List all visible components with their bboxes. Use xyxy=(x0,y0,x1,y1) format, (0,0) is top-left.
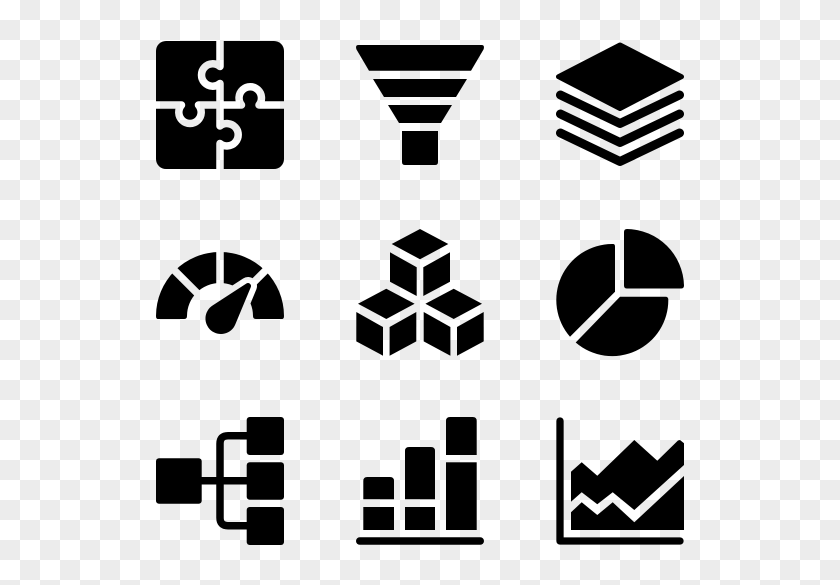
icon: puzzle xyxy=(156,41,284,169)
top cube xyxy=(390,229,450,296)
icon: pie chart xyxy=(556,229,684,356)
icon grid xyxy=(156,41,684,545)
icon: layers xyxy=(558,45,682,162)
icon: bar chart xyxy=(356,417,484,545)
icon: cubes xyxy=(356,229,484,356)
icon: gauge xyxy=(156,252,284,334)
left cube xyxy=(356,289,416,356)
right cube xyxy=(424,289,484,356)
icon: area chart xyxy=(560,421,684,541)
icon: funnel xyxy=(356,45,484,165)
icon: hierarchy tree xyxy=(156,417,284,545)
